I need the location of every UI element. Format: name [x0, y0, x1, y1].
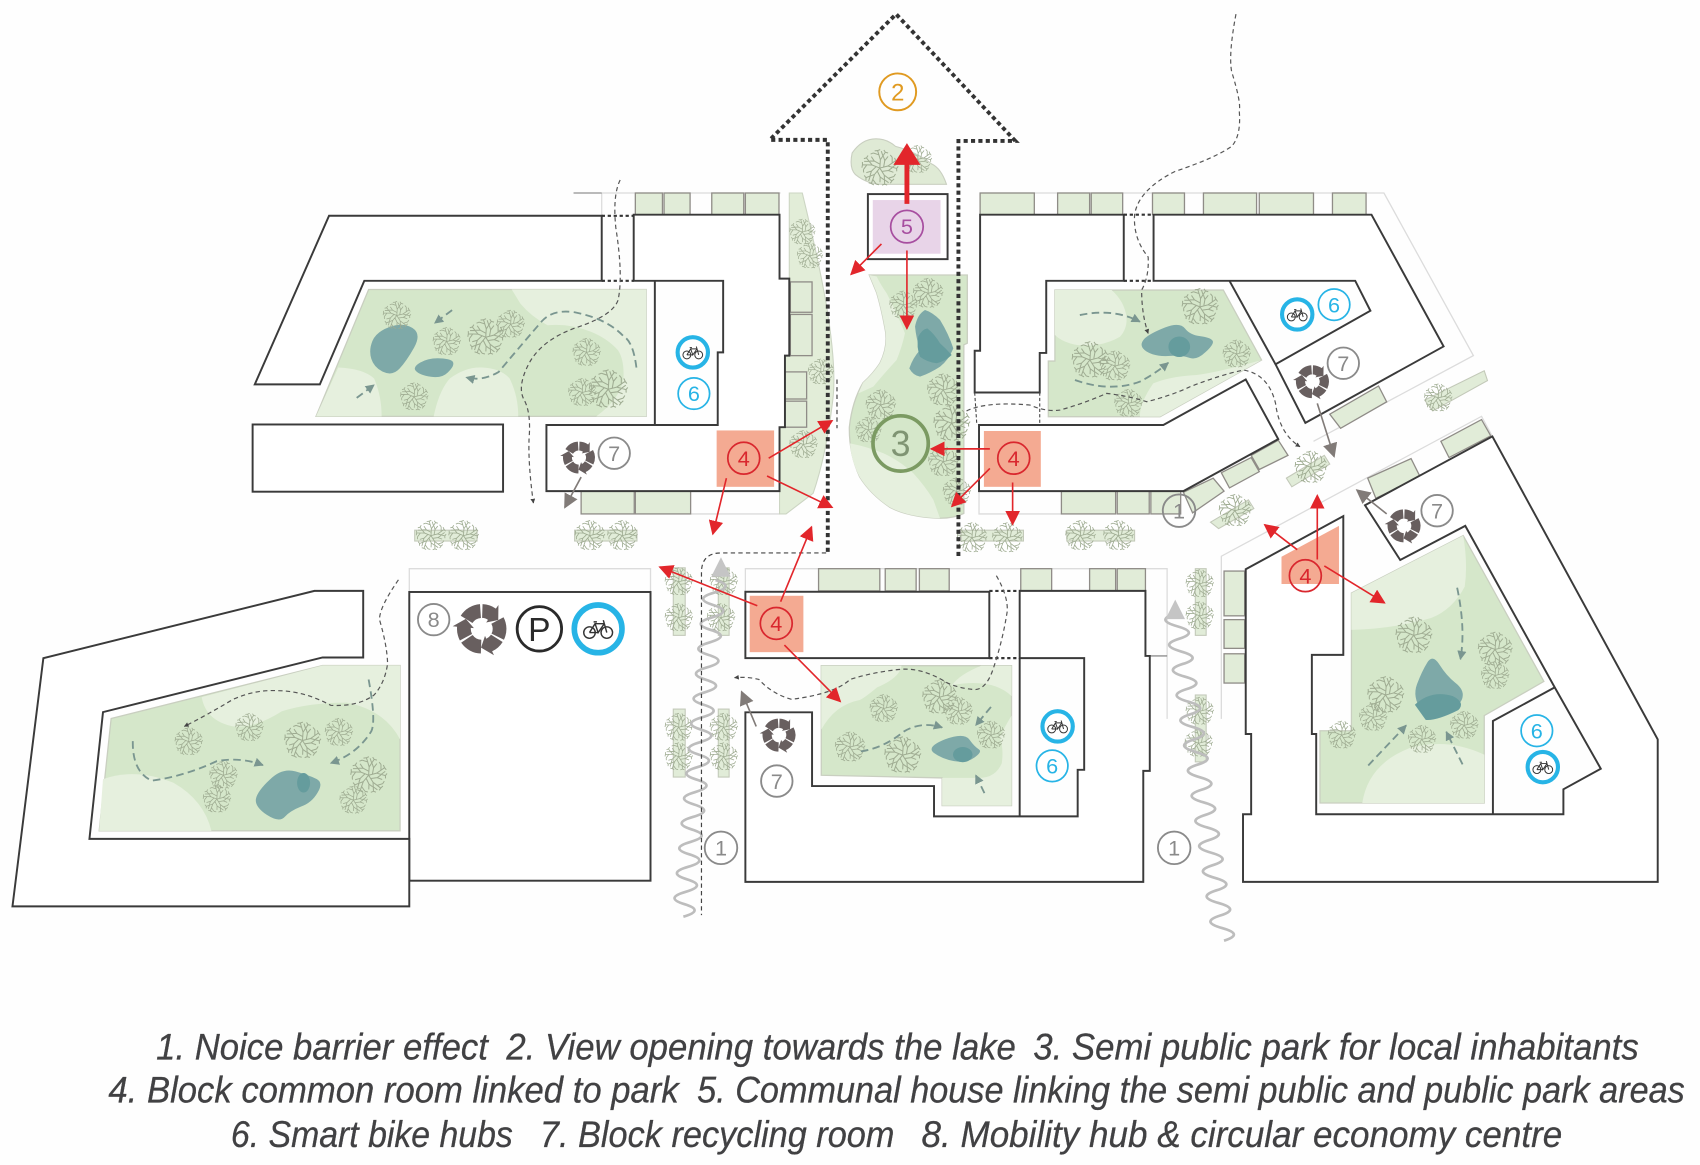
- legend text: [108, 1026, 1685, 1155]
- icon: parking: [517, 607, 562, 651]
- building: north-east lower block: [979, 379, 1278, 491]
- park: north-east courtyard: [967, 14, 1300, 447]
- legend text: 7. Block recycling room: [540, 1114, 894, 1155]
- legend text: 8. Mobility hub & circular economy centre: [922, 1114, 1562, 1155]
- legend text: 6. Smart bike hubs: [231, 1114, 513, 1155]
- number markers 7: recycling rooms: 7: [1337, 351, 1349, 376]
- number markers 6: smart bike hubs: 6: [1328, 292, 1340, 317]
- number marker 5: communal house: [891, 210, 923, 243]
- number markers 4: common rooms: [728, 442, 1321, 639]
- building: north-east right block: [1154, 215, 1444, 423]
- number markers 1: noise barrier: 1: [1168, 835, 1180, 860]
- park: south-east courtyard: [1320, 536, 1544, 803]
- common room: south-east: [1282, 526, 1339, 584]
- number markers 4: common rooms: 4: [738, 446, 750, 471]
- arrow: view to the lake: [893, 143, 920, 204]
- number markers 7: recycling rooms: 7: [771, 769, 783, 794]
- common room: north-east: [984, 431, 1041, 487]
- legend text: 1. Noice barrier effect: [156, 1026, 490, 1067]
- icon: recycling symbols: [452, 365, 1425, 755]
- building: north-west L block: [546, 215, 789, 491]
- number markers 1: noise barrier: [705, 494, 1195, 864]
- number marker 8: mobility hub: 8: [428, 607, 440, 632]
- planters: south and south-east blocks: [819, 420, 1491, 683]
- icon: smart bike hub rings: [574, 299, 1558, 782]
- legend text: 4. Block common room linked to park: [108, 1070, 680, 1111]
- building: west bar: [253, 424, 503, 492]
- park: west courtyard: [316, 180, 646, 503]
- building: south-east block: [1243, 436, 1658, 882]
- number marker 5: communal house: 5: [901, 214, 913, 239]
- number markers 4: common rooms: 4: [1299, 563, 1311, 588]
- number marker 8: mobility hub: [418, 604, 449, 635]
- noise barrier wave: west street: [675, 557, 731, 917]
- legend text: 3. Semi public park for local inhabitants: [1033, 1026, 1639, 1067]
- building: north-east left block: [975, 215, 1154, 425]
- number marker 3: semi public park: 3: [891, 424, 911, 464]
- number markers 4: common rooms: 4: [770, 611, 782, 636]
- number markers 6: smart bike hubs: [678, 289, 1553, 782]
- communal house: [868, 194, 948, 259]
- noise barrier wave: east street: [1165, 600, 1234, 941]
- park: south-west courtyard: [99, 580, 400, 831]
- number marker 2: view opening: 2: [891, 79, 904, 106]
- central semi public park: [849, 275, 972, 518]
- gray arrows: recycling rooms to street: [565, 403, 1387, 726]
- number markers 6: smart bike hubs: 6: [688, 381, 700, 406]
- common room: south: [750, 596, 803, 652]
- icon: parking: P: [528, 612, 551, 649]
- red arrows: common rooms to surroundings: [660, 244, 1385, 701]
- number markers 1: noise barrier: 1: [715, 835, 727, 860]
- number markers 7: recycling rooms: 7: [608, 441, 620, 466]
- view corridor dotted arrow: [770, 14, 1015, 557]
- street edge outlines: [409, 193, 1492, 719]
- planters: north-west block: [581, 193, 779, 514]
- number markers 6: smart bike hubs: 6: [1531, 718, 1543, 743]
- number markers 7: recycling rooms: [598, 348, 1453, 797]
- fine dashed link along west street: [701, 553, 826, 915]
- building: south common bar: [745, 592, 989, 658]
- number markers 1: noise barrier: 1: [1173, 498, 1185, 523]
- number markers 7: recycling rooms: 7: [1431, 498, 1443, 523]
- fine dashed link beside view corridor: [836, 379, 838, 428]
- number markers 6: smart bike hubs: 6: [1046, 754, 1058, 779]
- small green area in front of communal house: [851, 139, 946, 189]
- number markers 4: common rooms: 4: [1008, 446, 1020, 471]
- park: south courtyard: [735, 576, 1012, 806]
- planters: north-east blocks: [980, 193, 1387, 514]
- green strip beside central axis: [780, 193, 835, 514]
- number marker 2: view opening: [879, 73, 916, 110]
- building: south-west block: [12, 591, 409, 906]
- legend text: 2. View opening towards the lake: [505, 1026, 1016, 1067]
- number marker 3: semi public park: [873, 416, 928, 471]
- building: mobility hub: [409, 592, 651, 881]
- common room: north-west: [717, 430, 774, 487]
- building: north-west block: [255, 216, 602, 384]
- street trees: [414, 371, 1487, 777]
- building: south block: [745, 591, 1150, 882]
